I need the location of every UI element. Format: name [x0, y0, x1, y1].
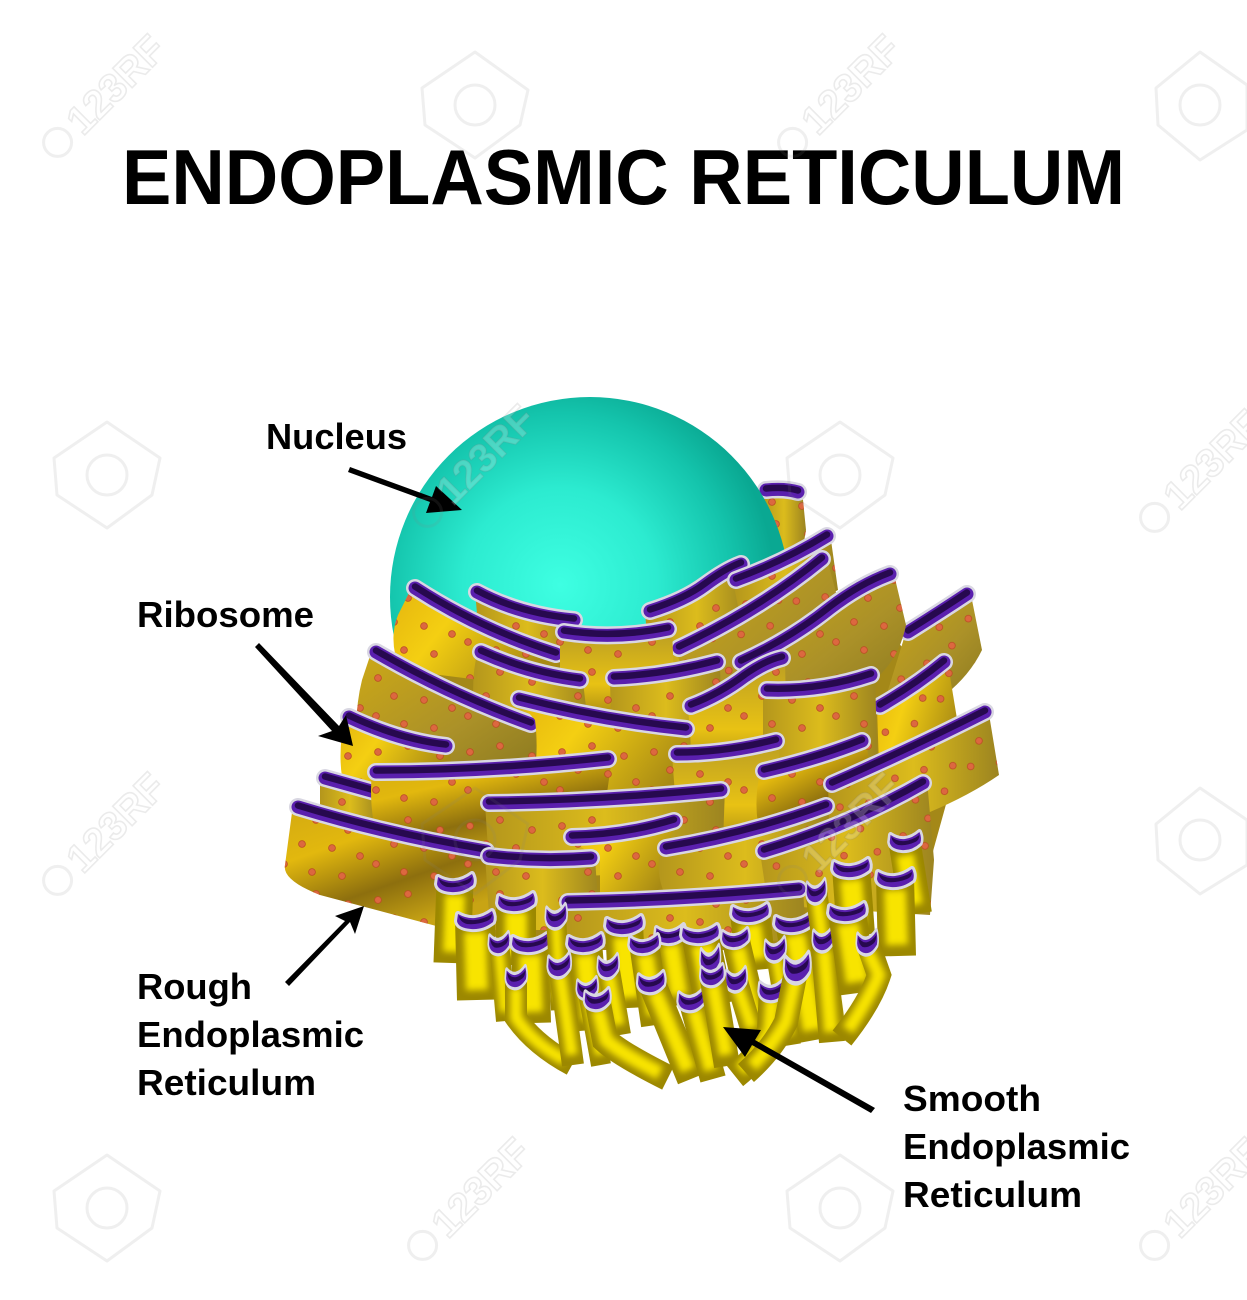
- sheet B: [393, 585, 560, 690]
- arrow: smooth ER: [723, 1027, 875, 1113]
- label: Smooth Endoplasmic Reticulum: Endoplasmic: [903, 1126, 1130, 1167]
- sheet AA: front left: [285, 805, 495, 927]
- sheet E: [645, 560, 748, 670]
- sheet L: [610, 660, 722, 770]
- sheet I: [885, 590, 982, 700]
- watermarks: 123RF: [423, 1130, 539, 1246]
- sheet U: [320, 775, 380, 835]
- title: ENDOPLASMIC RETICULUM: [122, 133, 1125, 221]
- arrow: ribosome: [255, 643, 353, 746]
- sheet Q: [340, 715, 452, 790]
- label: Rough Endoplasmic Reticulum: Endoplasmic: [137, 1014, 364, 1055]
- filler mass behind the sheets: [300, 620, 950, 950]
- sheet G: [675, 555, 838, 720]
- sheet V: [371, 758, 612, 850]
- watermarks: 123RF: [58, 765, 174, 881]
- nucleus: [390, 397, 790, 797]
- watermarks: 123RF: [428, 397, 544, 513]
- sheet AC: [564, 888, 806, 945]
- sheet O: [877, 658, 958, 795]
- label: Smooth Endoplasmic Reticulum: Smooth: [903, 1078, 1041, 1119]
- sheet W: [485, 788, 725, 880]
- back sheet behind nucleus: [762, 488, 806, 565]
- sheet S: [756, 738, 872, 840]
- sheet T: [828, 708, 999, 840]
- label: Smooth Endoplasmic Reticulum: Reticulum: [903, 1174, 1082, 1215]
- label: Nucleus: Nucleus: [266, 416, 407, 457]
- sheet K: [473, 650, 590, 740]
- sheet H: [737, 570, 906, 700]
- label: Rough Endoplasmic Reticulum: Reticulum: [137, 1062, 316, 1103]
- rough endoplasmic reticulum: stacked sheets with ribosome dots: [285, 533, 999, 950]
- smooth endoplasmic reticulum: yellow tubes with open ends: [437, 859, 914, 1079]
- back-right smooth tube: [890, 832, 921, 914]
- sheet D: [560, 628, 674, 730]
- sheet N: [763, 672, 878, 795]
- arrow: rough ER: [285, 906, 364, 986]
- sheet M: [688, 655, 786, 790]
- label: Rough Endoplasmic Reticulum: Rough: [137, 966, 252, 1007]
- sheet X: [568, 818, 678, 900]
- arrow: nucleus: [348, 467, 462, 513]
- sheet AB: [485, 854, 600, 930]
- sheet Y: [659, 803, 832, 895]
- watermarks: 123RF: [793, 27, 909, 143]
- sheet J: [356, 650, 538, 770]
- sheet F: [733, 533, 838, 640]
- sheet Z: [760, 780, 934, 915]
- label: Ribosome: Ribosome: [137, 594, 314, 635]
- sheet C: [475, 590, 580, 650]
- sheet P: [515, 697, 692, 810]
- watermarks: 123RF: [793, 765, 909, 881]
- watermarks: 123RF: [58, 27, 174, 143]
- sheet R: [672, 738, 780, 860]
